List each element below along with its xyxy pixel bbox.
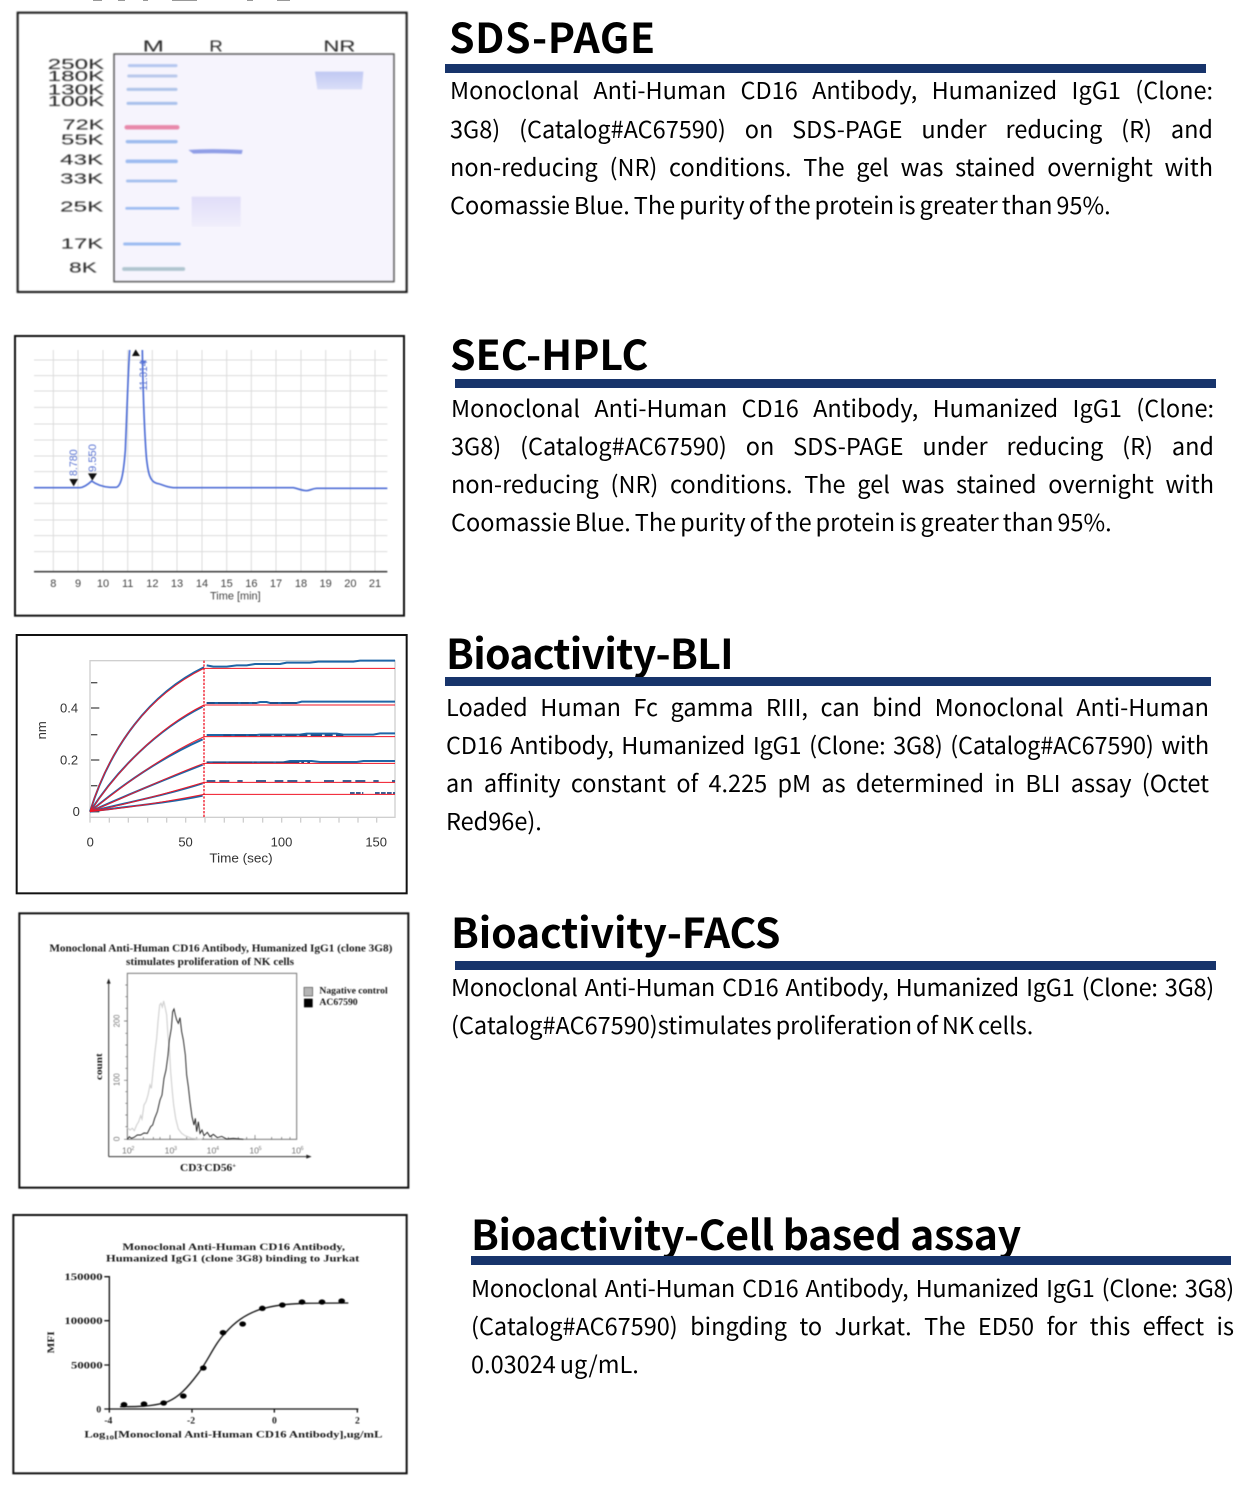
axis labels: 0 <box>73 804 80 819</box>
axis labels: 10 <box>207 1146 216 1156</box>
axis labels: + <box>232 1164 237 1170</box>
axis labels: 2 <box>355 1415 360 1426</box>
time axis: 18 <box>295 578 307 590</box>
text block: BLI description: Loaded Human Fc gamma RIII, can bind Monoclonal Anti-Human <box>446 688 1209 722</box>
chart title: Monoclonal Anti-Human CD16 Antibody, <box>122 1242 346 1253</box>
molecular weight labels: 8K <box>69 260 97 277</box>
axis labels: 4 <box>216 1146 219 1152</box>
axis labels: MFI <box>46 1331 57 1353</box>
legend: AC67590 <box>319 997 358 1007</box>
axis labels: 100 <box>271 835 292 850</box>
time axis: 20 <box>344 578 356 590</box>
legend: Nagative control <box>319 986 388 996</box>
peak labels: 11.314 <box>138 361 150 391</box>
axes <box>107 978 312 1159</box>
chart title <box>106 1242 360 1265</box>
text block: FACS description <box>451 968 1214 1041</box>
text block: cell based assay description: Monoclonal Anti-Human CD16 Antibody, Humanized IgG1 (Clone: 3G8) <box>471 1270 1234 1304</box>
text block: SDS-PAGE description: non-reducing (NR) conditions. The gel was stained overnight with <box>450 149 1213 183</box>
axis labels: 0.2 <box>60 752 78 767</box>
peak markers <box>69 349 147 486</box>
axis labels: -4 <box>104 1415 113 1426</box>
text block: cell based assay description: (Catalog#AC67590) bingding to Jurkat. The ED50 for this effect is <box>471 1308 1234 1342</box>
axis labels: 10 <box>105 1434 115 1441</box>
AC67590 histogram <box>127 1009 243 1139</box>
text block: SEC-HPLC description: non-reducing (NR) conditions. The gel was stained overnight with <box>451 466 1214 500</box>
molecular weight labels: 25K <box>60 199 103 216</box>
chart title: Humanized IgG1 (clone 3G8) binding to Jurkat <box>106 1254 360 1265</box>
molecular weight labels: 55K <box>61 131 104 148</box>
fitted curve <box>120 1303 348 1407</box>
axis labels: Time (sec) <box>209 850 273 865</box>
axis labels <box>95 1015 304 1174</box>
lane labels <box>143 39 355 56</box>
axis labels: - <box>202 1164 204 1170</box>
axis labels: nm <box>34 721 49 739</box>
time axis: 8 <box>50 578 56 590</box>
molecular weight labels: 17K <box>61 235 103 252</box>
peak labels: 8.780 <box>68 449 80 476</box>
panel: BLI sensorgram <box>16 634 408 894</box>
axis labels: 150000 <box>64 1272 103 1283</box>
gel background <box>114 54 394 282</box>
heading: SEC-HPLC: SEC-HPLC <box>450 322 648 382</box>
axis labels: 0 <box>87 835 94 850</box>
heading: SDS-PAGE: SDS-PAGE <box>449 5 656 65</box>
axis labels: 5 <box>259 1146 262 1152</box>
panel: FACS histogram <box>18 912 410 1190</box>
text block: cell based assay description <box>471 1270 1234 1380</box>
text block: SDS-PAGE description <box>450 72 1213 221</box>
axis labels: 0 <box>96 1404 101 1415</box>
axis labels: 10 <box>165 1146 174 1156</box>
axis labels <box>46 1272 383 1441</box>
time axis <box>34 572 387 603</box>
molecular weight labels: 72K <box>63 116 104 133</box>
lane labels: R <box>209 39 223 56</box>
peak labels: 9.550 <box>87 444 99 472</box>
molecular weight labels: 180K <box>48 68 104 85</box>
measured curves <box>90 661 395 812</box>
time axis: Time [min] <box>210 591 261 603</box>
chart title: Monoclonal Anti-Human CD16 Antibody, Humanized IgG1 (clone 3G8) <box>49 944 392 955</box>
heading: Bioactivity-BLI: Bioactivity-BLI <box>446 621 733 681</box>
axis labels: -2 <box>187 1415 195 1426</box>
molecular weight labels: 43K <box>60 151 103 168</box>
text block: SEC-HPLC description: Monoclonal Anti-Human CD16 Antibody, Humanized IgG1 (Clone: <box>451 390 1214 424</box>
axis labels: 0.4 <box>60 700 78 715</box>
chart title: stimulates proliferation of NK cells <box>126 957 294 968</box>
axis labels: CD3 <box>180 1163 200 1174</box>
lane labels: NR <box>323 39 355 56</box>
axis labels: 100000 <box>64 1316 103 1327</box>
axis labels: 150 <box>365 835 387 850</box>
molecular weight labels: 130K <box>48 81 104 98</box>
axis labels: 0 <box>272 1415 277 1426</box>
axis labels: Log <box>84 1429 100 1440</box>
panel: SEC-HPLC chromatogram <box>13 334 406 618</box>
axis labels: 0 <box>111 1136 121 1141</box>
molecular weight labels <box>48 56 104 277</box>
time axis: 9 <box>75 578 81 590</box>
axis labels: 2 <box>131 1146 134 1152</box>
axis labels: 50000 <box>71 1360 103 1371</box>
axis labels: 10 <box>249 1146 259 1156</box>
non-reducing lane band <box>315 72 363 89</box>
axis labels: 50 <box>178 835 193 850</box>
text block: cell based assay description: 0.03024 ug/mL. <box>471 1346 639 1380</box>
time axis: 16 <box>245 578 257 590</box>
data points <box>121 1298 345 1407</box>
text block: FACS description: Monoclonal Anti-Human CD16 Antibody, Humanized IgG1 (Clone: 3G8) <box>451 968 1214 1002</box>
axis labels: 6 <box>301 1146 304 1152</box>
text block: BLI description: CD16 Antibody, Humanized IgG1 (Clone: 3G8) (Catalog#AC67590) with <box>446 727 1209 761</box>
text block: BLI description: an affinity constant of 4.225 pM as determined in BLI assay (Octet <box>446 765 1209 799</box>
text block: SEC-HPLC description <box>451 390 1214 538</box>
peak labels <box>68 361 150 476</box>
text block: BLI description <box>446 688 1209 837</box>
axis labels: 200 <box>111 1015 121 1027</box>
heading: Bioactivity-Cell based assay: Bioactivity-Cell based assay <box>471 1202 1021 1262</box>
panel: cell based assay dose-response curve <box>12 1213 408 1476</box>
legend <box>304 986 388 1007</box>
fitted curves <box>90 661 395 817</box>
axis labels: [Monoclonal Anti-Human CD16 Antibody],ug/mL <box>114 1429 383 1440</box>
text block: SDS-PAGE description: Monoclonal Anti-Human CD16 Antibody, Humanized IgG1 (Clone: <box>450 72 1213 106</box>
plot frame <box>127 973 297 1139</box>
text block: SDS-PAGE description: Coomassie Blue. The purity of the protein is greater than 95%. <box>450 187 1111 221</box>
time axis: 15 <box>221 578 233 590</box>
time axis: 12 <box>146 578 158 590</box>
time axis: 14 <box>196 578 208 590</box>
text block: SEC-HPLC description: Coomassie Blue. The purity of the protein is greater than 95%. <box>451 504 1112 538</box>
grid <box>34 350 387 572</box>
time axis: 13 <box>171 578 183 590</box>
molecular weight labels: 33K <box>60 171 103 188</box>
axis labels: count <box>95 1052 105 1080</box>
axis labels: CD56 <box>204 1163 232 1174</box>
axis labels <box>34 700 387 865</box>
time axis: 19 <box>320 578 332 590</box>
marker lane bands <box>124 66 183 269</box>
text block: SEC-HPLC description: 3G8) (Catalog#AC67590) on SDS-PAGE under reducing (R) and <box>451 428 1214 462</box>
plot frame and ticks <box>90 661 395 823</box>
chromatogram trace <box>34 350 387 491</box>
time axis: 17 <box>270 578 282 590</box>
lane labels: M <box>143 39 164 56</box>
text block: BLI description: Red96e). <box>446 803 542 837</box>
axis labels: 100 <box>111 1073 121 1086</box>
panel: SDS-PAGE gel image <box>16 10 409 294</box>
text block: SDS-PAGE description: 3G8) (Catalog#AC67590) on SDS-PAGE under reducing (R) and <box>450 111 1213 145</box>
measured curve noise <box>207 703 395 793</box>
molecular weight labels: 100K <box>48 93 104 110</box>
axis labels: 10 <box>291 1146 301 1156</box>
reducing lane bands <box>188 149 243 227</box>
molecular weight labels: 250K <box>48 56 104 73</box>
axis labels: 3 <box>174 1146 177 1152</box>
chart title <box>49 944 392 968</box>
time axis: 21 <box>369 578 381 590</box>
axes <box>104 1277 358 1413</box>
time axis: 10 <box>97 578 109 590</box>
text block: FACS description: (Catalog#AC67590)stimulates proliferation of NK cells. <box>451 1007 1033 1041</box>
time axis: 11 <box>122 578 133 590</box>
axis labels: 10 <box>122 1146 132 1156</box>
heading: Bioactivity-FACS: Bioactivity-FACS <box>451 900 780 960</box>
negative control histogram <box>127 1001 202 1139</box>
